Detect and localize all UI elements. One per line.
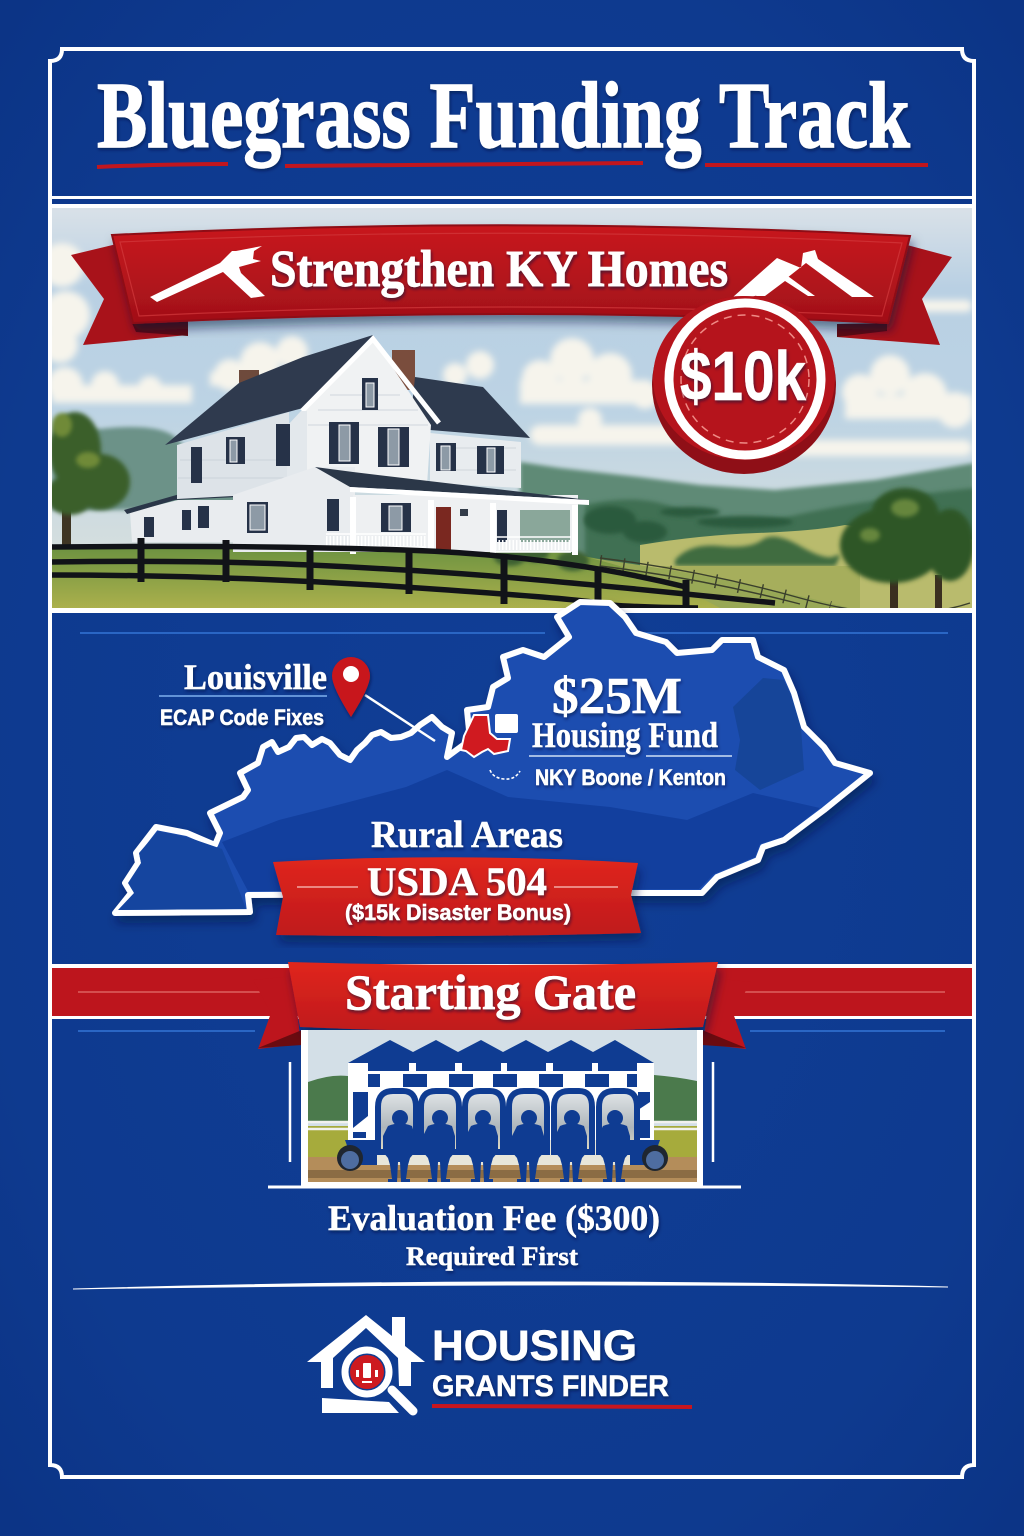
ribbon tails	[253, 976, 301, 1049]
evaluation fee text: Evaluation Fee ($300)	[328, 1198, 660, 1238]
icon: house with magnifier	[307, 1315, 425, 1413]
scene	[308, 1030, 697, 1130]
gate base	[345, 1140, 660, 1165]
porch roof	[315, 467, 589, 500]
lower wall	[233, 477, 355, 552]
ribbon band	[112, 225, 910, 323]
USDA banner: USDA 504	[367, 859, 547, 904]
ribbon band	[288, 962, 718, 1032]
farmhouse	[124, 335, 589, 555]
icon: left roof	[150, 246, 265, 302]
ribbon text: Strengthen KY Homes	[270, 241, 728, 298]
grass	[52, 549, 720, 608]
starting gate illustration	[268, 1030, 741, 1187]
gate top bars	[353, 1063, 650, 1138]
band: Starting Gate	[52, 962, 972, 1049]
map of Kentucky	[115, 602, 870, 936]
front gable	[303, 338, 431, 485]
right roof	[412, 377, 530, 438]
left wing	[130, 500, 238, 542]
bushes	[492, 549, 591, 574]
sky	[52, 208, 972, 544]
housing fund text: Housing Fund	[532, 715, 718, 755]
badge text: $10k	[680, 337, 806, 415]
tree left	[46, 412, 130, 545]
upper left wall	[177, 412, 289, 499]
chimneys	[239, 370, 259, 383]
porch rail	[326, 534, 571, 552]
fence far	[600, 558, 970, 613]
Louisville region	[159, 657, 435, 741]
state outline	[115, 602, 870, 913]
gate arches	[378, 1091, 637, 1152]
housing fund text: $25M	[552, 668, 682, 725]
clouds	[40, 243, 973, 456]
icon: right roof	[733, 250, 874, 297]
ribbon tails	[71, 243, 952, 345]
housing fund text	[529, 668, 732, 790]
logo: Housing Grants Finder: GRANTS FINDER	[432, 1370, 669, 1403]
icon: NKY marker	[461, 714, 520, 779]
porch window green	[520, 510, 570, 542]
logo text: HOUSING	[432, 1322, 637, 1370]
title underline	[97, 163, 928, 167]
right wall	[430, 433, 521, 488]
icon: map pin	[332, 657, 370, 717]
header panel dividers	[52, 196, 972, 613]
rural areas label: Rural Areas	[371, 814, 563, 856]
heading: Starting Gate	[345, 964, 636, 1020]
east region	[733, 678, 804, 790]
map section faint lines	[80, 632, 948, 634]
evaluation fee text	[328, 1198, 660, 1271]
door	[436, 507, 451, 553]
left roof	[165, 335, 373, 445]
USDA banner	[273, 857, 641, 936]
meadow	[640, 525, 974, 610]
logo: Housing Grants Finder	[307, 1315, 692, 1413]
ribbon: Strengthen KY Homes	[71, 225, 952, 345]
south region	[222, 770, 820, 891]
hills	[52, 427, 250, 510]
housing fund text: NKY Boone / Kenton	[535, 765, 726, 790]
wheels	[337, 1145, 668, 1171]
tree right	[840, 488, 974, 608]
west region	[118, 831, 246, 910]
USDA banner: ($15k Disaster Bonus)	[345, 900, 571, 925]
gate body	[348, 1063, 654, 1140]
Louisville label: Louisville	[184, 657, 327, 697]
gate side panels	[353, 1092, 650, 1138]
side rails	[290, 1062, 713, 1162]
badge: $10k	[652, 296, 836, 474]
windows	[144, 378, 507, 542]
pointer line	[365, 695, 435, 741]
siding lines	[178, 395, 516, 478]
columns	[350, 497, 578, 555]
Louisville region: ECAP Code Fixes	[160, 705, 324, 730]
photo panel: farmhouse landscape	[40, 208, 974, 613]
evaluation fee text: Required First	[406, 1242, 578, 1271]
gate roof	[348, 1040, 654, 1063]
horse silhouettes	[383, 1110, 630, 1182]
fence near	[52, 538, 775, 608]
